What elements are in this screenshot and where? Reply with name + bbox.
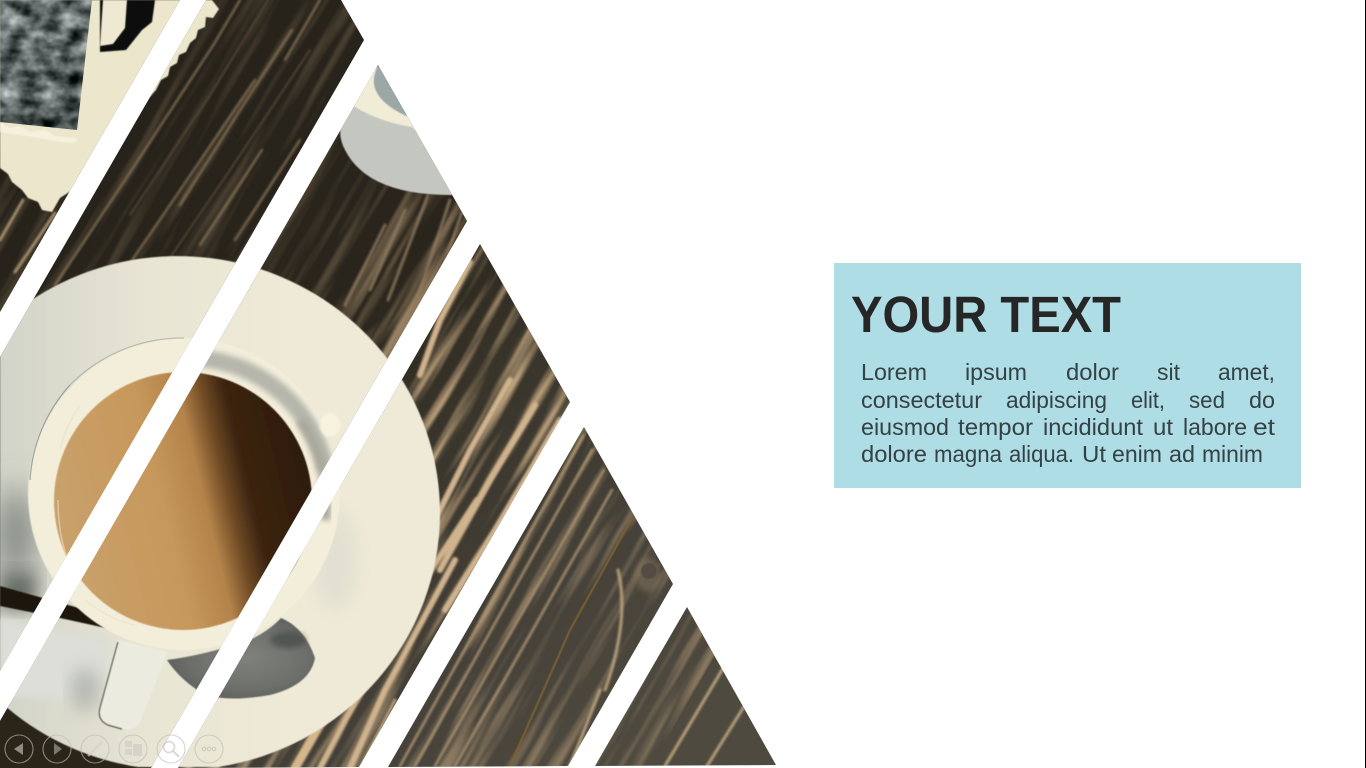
icon: slides — [119, 735, 147, 763]
body text: do — [1249, 387, 1275, 413]
cup handle — [99, 640, 168, 730]
body text: Ut — [1082, 441, 1107, 467]
heading: YOUR TEXT — [851, 286, 1121, 343]
presentation toolbar icons — [5, 735, 223, 763]
body text: incididunt — [1043, 414, 1144, 440]
body text: eiusmod — [861, 414, 949, 440]
wood knot — [635, 558, 661, 592]
black and white photo on paper — [0, 0, 155, 143]
triangular photo of coffee cup on wood, cut into diagonal bands — [0, 0, 800, 768]
body text — [861, 359, 1276, 467]
icon: more — [195, 735, 223, 763]
paper napkin with scalloped edge — [0, 0, 219, 212]
small cup at the top — [340, 66, 452, 196]
body text: Lorem — [861, 359, 927, 385]
body text: dolor — [1066, 359, 1119, 385]
body text: et — [1253, 414, 1276, 440]
body text: dolore — [861, 441, 927, 467]
wood table background — [0, 0, 800, 768]
body text: ut — [1153, 414, 1174, 440]
icon: magnifier — [157, 735, 185, 763]
body text: magna — [934, 441, 1002, 467]
saucer — [0, 256, 440, 767]
spoon handle — [0, 586, 115, 630]
body text: amet, — [1218, 359, 1275, 385]
coffee cup — [28, 338, 340, 650]
text panel — [834, 263, 1301, 488]
spoon bowl — [167, 618, 315, 698]
body text: enim — [1112, 441, 1162, 467]
body text: adipiscing — [1006, 387, 1107, 413]
icon: next — [43, 735, 71, 763]
body text: sed — [1189, 387, 1225, 413]
body text: labore — [1183, 414, 1247, 440]
body text: aliqua. — [1009, 441, 1074, 467]
dark shape with cream insert — [100, 0, 155, 52]
icon: previous — [5, 735, 33, 763]
icon: pen — [81, 735, 109, 763]
dark table corner — [0, 700, 180, 768]
body text: minim — [1202, 441, 1263, 467]
body text: elit, — [1131, 387, 1165, 413]
cup shadows on saucer — [0, 487, 357, 712]
body text: tempor — [958, 414, 1033, 440]
body text: sit — [1157, 359, 1181, 385]
body text: consectetur — [861, 387, 982, 413]
body text: ad — [1169, 441, 1195, 467]
body text: ipsum — [965, 359, 1027, 385]
